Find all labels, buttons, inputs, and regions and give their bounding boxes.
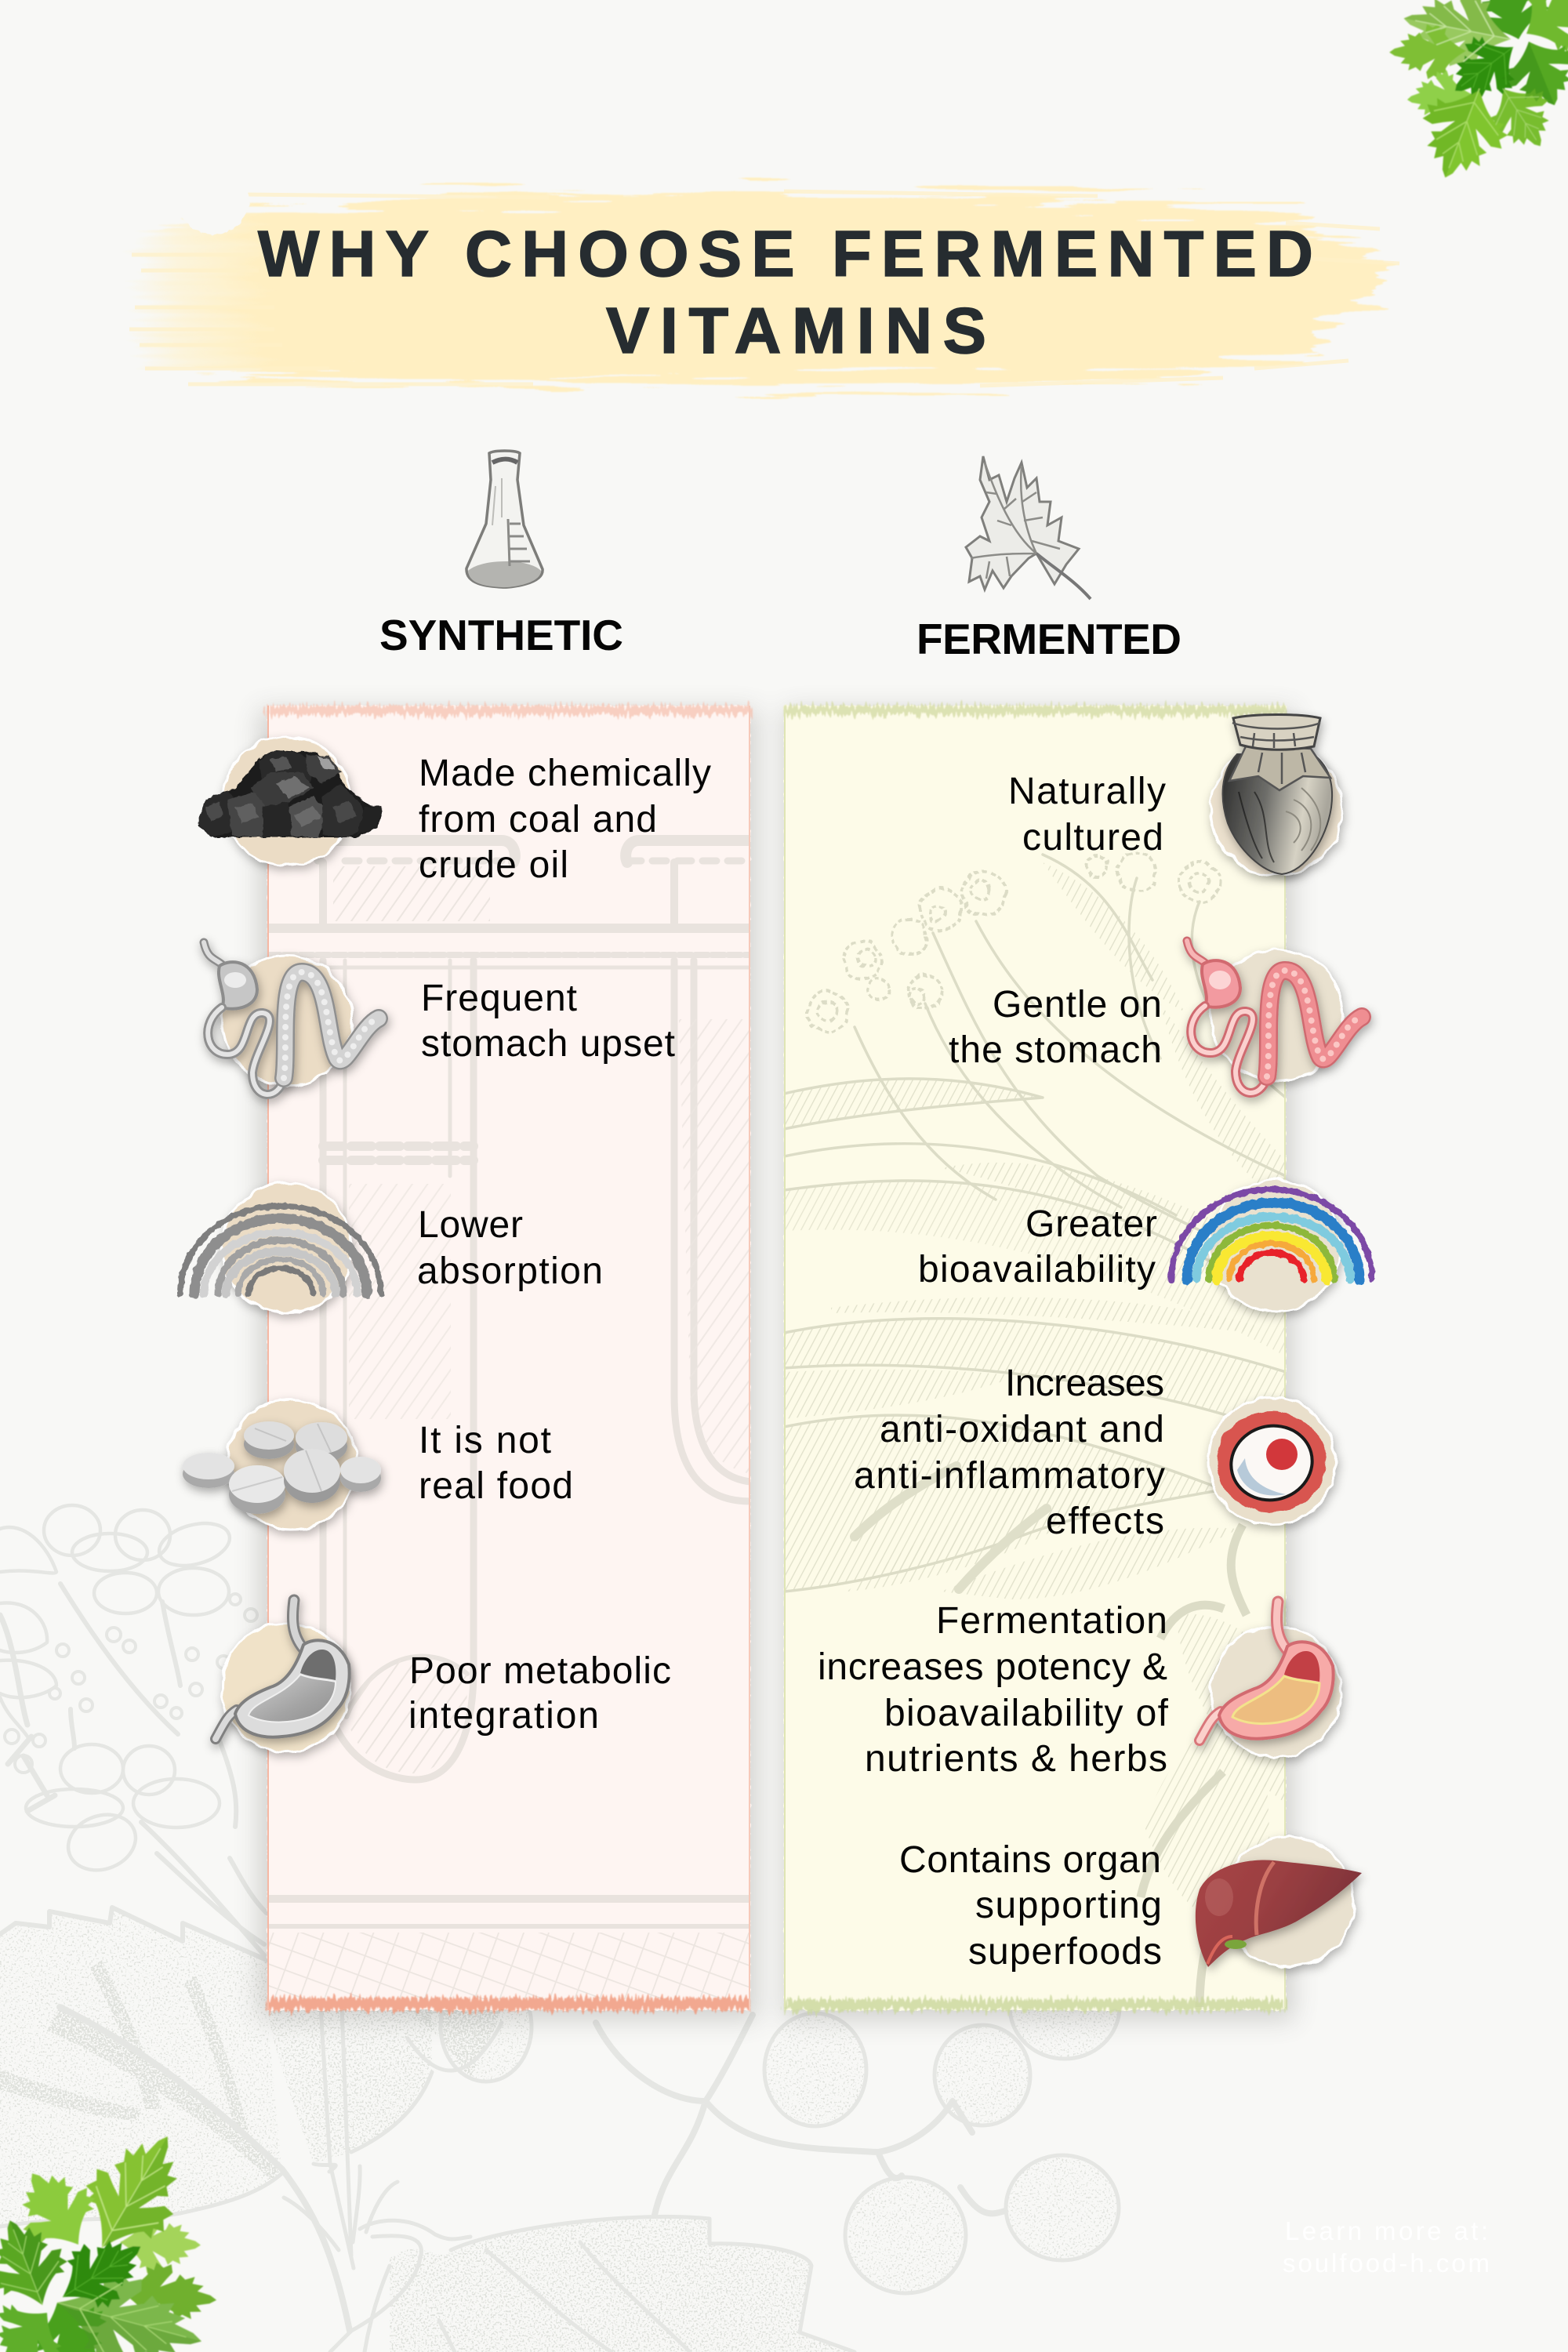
panel shadows <box>259 710 1294 2020</box>
text: fermentation potency: bioavailability of <box>884 1693 1169 1734</box>
panel: synthetic <box>267 706 750 2010</box>
botanical: stippled leaves and berries <box>0 1907 1118 2352</box>
text: frequent stomach upset: Frequent <box>421 978 577 1019</box>
text: antioxidant effects: effects <box>1046 1501 1164 1542</box>
icon: gray stomach <box>216 1600 350 1751</box>
panel edges <box>267 706 750 2010</box>
text: made chemically: crude oil <box>419 844 568 886</box>
text: frequent stomach upset: stomach upset <box>421 1023 675 1065</box>
heading: synthetic: SYNTHETIC <box>379 611 623 659</box>
text: naturally cultured <box>1008 771 1166 858</box>
icon: herb leaf sketch <box>966 456 1091 599</box>
text: poor metabolic integration: integration <box>408 1695 599 1737</box>
text: antioxidant effects: Increases <box>1005 1363 1164 1404</box>
text: antioxidant effects: anti-inflammatory <box>854 1455 1165 1497</box>
title: WHY CHOOSE FERMENTED <box>258 217 1313 290</box>
footer link text: soulfood-h.com <box>1283 2249 1490 2278</box>
text: fermentation potency: increases potency & <box>818 1646 1167 1688</box>
text: naturally cultured: cultured <box>1022 817 1163 858</box>
icon: fermentation pot <box>1210 715 1342 875</box>
text: poor metabolic integration <box>408 1650 671 1737</box>
text: not real food <box>419 1420 573 1507</box>
text: naturally cultured: Naturally <box>1008 771 1166 812</box>
text: poor metabolic integration: Poor metabolic <box>409 1650 671 1692</box>
panel: fermented <box>784 706 1286 2010</box>
icon: gray digestive tract <box>204 942 379 1094</box>
text: fermentation potency: nutrients & herbs <box>865 1738 1167 1780</box>
text: made chemically: from coal and <box>419 799 657 840</box>
text: frequent stomach upset <box>421 978 675 1065</box>
text: organ superfoods <box>899 1839 1162 1973</box>
text: gentle on the stomach: Gentle on <box>993 984 1162 1025</box>
text: antioxidant effects: anti-oxidant and <box>880 1409 1164 1450</box>
icon: gray rainbow <box>180 1183 381 1313</box>
panel edges <box>784 706 1286 2010</box>
footer link text <box>1283 2216 1490 2278</box>
text: not real food: It is not <box>419 1420 551 1461</box>
text: made chemically: Made chemically <box>419 753 711 794</box>
text: antioxidant effects <box>854 1363 1165 1542</box>
icon: flask <box>466 451 543 587</box>
icon: pills <box>183 1399 381 1530</box>
text: gentle on the stomach: the stomach <box>949 1029 1162 1071</box>
title brush highlight <box>129 165 1399 387</box>
heading: fermented: FERMENTED <box>916 615 1181 663</box>
text: lower absorption <box>417 1204 603 1292</box>
icon: healthy cell <box>1208 1398 1335 1525</box>
footer link text: Learn more at: <box>1285 2216 1488 2245</box>
background botanical illustration <box>0 1505 1120 2352</box>
text: lower absorption: absorption <box>417 1250 603 1292</box>
text: organ superfoods: supporting <box>975 1885 1162 1926</box>
icon: liver <box>1196 1837 1362 1967</box>
icon: coal <box>198 737 383 866</box>
watermark: fern plant <box>784 853 1286 2007</box>
text: fermentation potency: Fermentation <box>936 1600 1167 1642</box>
text: organ superfoods: superfoods <box>968 1931 1162 1973</box>
watermark: test tube rack <box>267 840 750 1999</box>
botanical: flowers at left <box>0 1505 267 1960</box>
text: fermentation potency <box>818 1600 1169 1780</box>
title: VITAMINS <box>606 294 986 367</box>
icon: rainbow <box>1171 1179 1372 1311</box>
icon: pink digestive tract <box>1187 941 1362 1093</box>
parsley: bottom left <box>0 2114 220 2352</box>
title <box>258 217 1313 367</box>
icon: pink stomach <box>1200 1602 1341 1757</box>
text: organ superfoods: Contains organ <box>899 1839 1161 1881</box>
text: made chemically <box>419 753 711 886</box>
parsley: top right <box>1389 0 1568 193</box>
text: greater bioavailability <box>918 1203 1157 1290</box>
text: greater bioavailability: bioavailability <box>918 1249 1156 1290</box>
text: lower absorption: Lower <box>418 1204 523 1246</box>
text: greater bioavailability: Greater <box>1025 1203 1157 1245</box>
botanical: stems and veins <box>0 1955 1120 2352</box>
text: gentle on the stomach <box>949 984 1162 1071</box>
text: not real food: real food <box>419 1465 573 1507</box>
